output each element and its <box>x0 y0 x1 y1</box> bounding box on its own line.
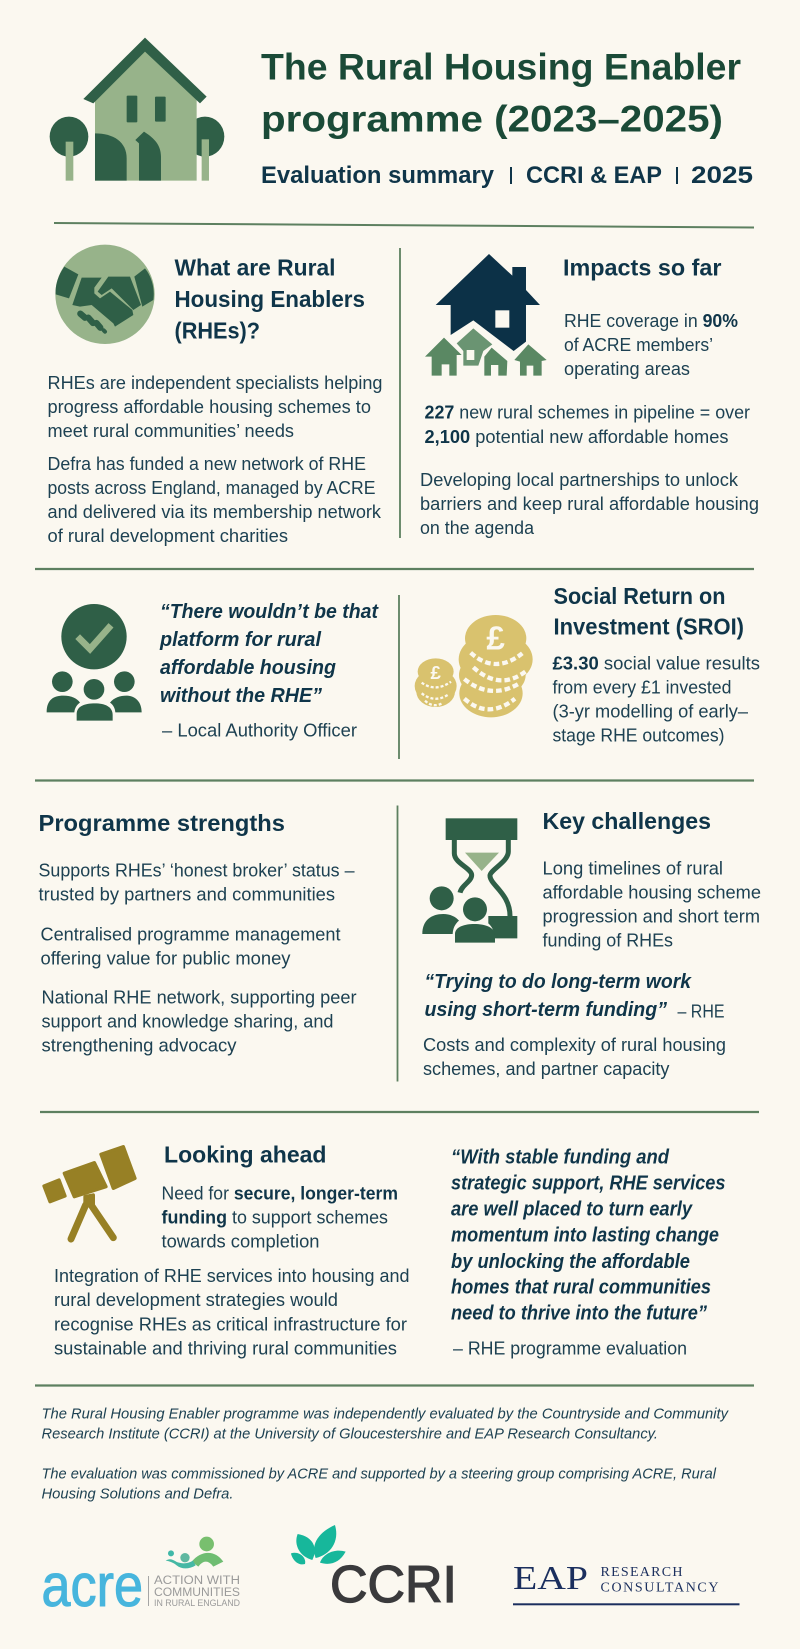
logo: CCRI: CCRI <box>330 1556 457 1614</box>
text block: secure funding: towards completion <box>162 1232 320 1252</box>
panel: looking ahead <box>44 1142 410 1358</box>
quote: momentum into lasting change <box>451 1224 719 1246</box>
text block: secure funding <box>162 1184 398 1252</box>
icon: group with check mark <box>47 604 142 721</box>
quote: affordable housing <box>160 657 336 679</box>
attribution: – Local Authority Officer <box>162 720 357 740</box>
quote: – RHE <box>678 1002 724 1022</box>
panel: key challenges <box>422 808 761 1079</box>
text block: timelines: affordable housing scheme <box>542 882 761 902</box>
panel: what are RHEs <box>48 245 383 546</box>
text block: coverage: operating areas <box>564 359 690 379</box>
text block: honest broker: Supports RHEs’ ‘honest broker’ status – <box>38 860 354 880</box>
text block: pipeline: 227 new rural schemes in pipeline = over <box>424 402 750 422</box>
heading: Investment (SROI) <box>554 614 744 640</box>
text block: coverage: of ACRE members’ <box>564 335 713 355</box>
quote: platform for rural <box>159 629 321 651</box>
header <box>50 38 753 189</box>
icon: coins: £ <box>430 662 441 683</box>
subtitle: CCRI & EAP <box>526 162 662 189</box>
footnote text <box>42 1406 729 1502</box>
quote: are well placed to turn early <box>451 1198 693 1220</box>
quote <box>159 601 379 707</box>
heading <box>174 254 365 344</box>
text block: partnerships: barriers and keep rural affordable housing <box>420 494 759 514</box>
quote: need to thrive into the future” <box>451 1302 707 1324</box>
quote: using short-term funding” <box>424 999 667 1021</box>
text block: Defra funding: posts across England, managed by ACRE <box>48 478 376 498</box>
footnote text: The Rural Housing Enabler programme was independently evaluated by the Countryside and Community <box>42 1406 729 1422</box>
subtitle <box>261 162 753 189</box>
title: programme (2023–2025) <box>261 98 723 140</box>
panel: evaluation quote <box>451 1146 726 1358</box>
text block: timelines: progression and short term <box>542 906 760 926</box>
logo: ACRE: ACTION WITH <box>154 1575 240 1587</box>
text block: national network: National RHE network, supporting peer <box>42 988 356 1008</box>
text block: national network: support and knowledge sharing, and <box>42 1012 334 1032</box>
attribution: – RHE programme evaluation <box>453 1338 687 1358</box>
text block: integration: recognise RHEs as critical infrastructure for <box>54 1314 407 1334</box>
text block: partnerships: Developing local partnerships to unlock <box>420 470 739 490</box>
heading: (RHEs)? <box>174 318 260 344</box>
text block: programme management: Centralised programme management <box>40 924 340 944</box>
heading: Housing Enablers <box>174 286 365 312</box>
text block: coverage <box>564 311 738 379</box>
heading <box>554 583 744 640</box>
heading: Impacts so far <box>563 254 722 280</box>
text block: definition: progress affordable housing schemes to <box>48 397 371 417</box>
footnote text: Research Institute (CCRI) at the University of Gloucestershire and EAP Research Consultancy. <box>42 1426 658 1442</box>
icon: house with trees <box>50 38 224 181</box>
icon: hourglass with people <box>422 818 517 943</box>
text block: programme management <box>40 924 340 968</box>
logo: EAP Research Consultancy: RESEARCH <box>600 1565 682 1580</box>
text block: costs <box>423 1035 726 1079</box>
text block: timelines: funding of RHEs <box>542 930 673 950</box>
logo: ACRE: acre <box>42 1552 143 1619</box>
quote: “There wouldn’t be that <box>160 601 379 623</box>
subtitle: Evaluation summary <box>261 162 494 189</box>
logo: EAP Research Consultancy: CONSULTANCY <box>600 1580 718 1596</box>
quote: by unlocking the affordable <box>451 1251 690 1273</box>
footnote text: Housing Solutions and Defra. <box>42 1486 233 1502</box>
text block: SROI value: from every £1 invested <box>552 678 732 698</box>
logo: EAP Research Consultancy: EAP <box>513 1560 588 1597</box>
text block: honest broker: trusted by partners and communities <box>38 884 335 904</box>
quote: without the RHE” <box>160 685 322 707</box>
text block: timelines: Long timelines of rural <box>542 858 723 878</box>
text block: SROI value: stage RHE outcomes) <box>552 726 724 746</box>
quote <box>424 971 724 1022</box>
text block: national network: strengthening advocacy <box>42 1036 237 1056</box>
footnote text: The evaluation was commissioned by ACRE and supported by a steering group comprising ACRE, Rural <box>42 1466 717 1482</box>
text block: honest broker <box>38 860 354 904</box>
text block: Defra funding <box>48 454 382 546</box>
quote <box>451 1146 726 1324</box>
text block: Defra funding: and delivered via its membership network <box>48 502 382 522</box>
logo: ACRE <box>42 1537 240 1619</box>
text block: secure funding: Need for secure, longer-term <box>162 1184 398 1204</box>
text block: pipeline: 2,100 potential new affordable homes <box>424 427 728 447</box>
title: The Rural Housing Enabler <box>261 46 741 88</box>
text block: definition <box>48 373 383 441</box>
text block: programme management: offering value for public money <box>40 948 290 968</box>
logo: CCRI <box>291 1525 457 1614</box>
text block: Defra funding: of rural development charities <box>48 526 288 546</box>
logo: ACRE: COMMUNITIES <box>154 1587 240 1599</box>
icon: coins <box>415 615 533 717</box>
icon: telescope <box>44 1147 135 1239</box>
heading: What are Rural <box>174 254 336 280</box>
text block: integration <box>54 1266 410 1358</box>
text block: integration: rural development strategies would <box>54 1290 338 1310</box>
heading: Social Return on <box>554 583 726 609</box>
quote: homes that rural communities <box>451 1276 711 1298</box>
text block: timelines <box>542 858 761 950</box>
panel: programme strengths <box>38 810 356 1056</box>
subtitle: 2025 <box>691 162 753 189</box>
text block: partnerships <box>420 470 759 538</box>
quote: strategic support, RHE services <box>451 1172 726 1194</box>
text block: pipeline <box>424 402 750 447</box>
text block: partnerships: on the agenda <box>420 518 535 538</box>
logo: ACRE: IN RURAL ENGLAND <box>154 1598 240 1609</box>
quote: “Trying to do long-term work <box>424 971 692 993</box>
heading: Key challenges <box>542 808 711 834</box>
text block: Defra funding: Defra has funded a new network of RHE <box>48 454 366 474</box>
text block: coverage: RHE coverage in 90% <box>564 311 738 331</box>
quote: “With stable funding and <box>451 1146 670 1168</box>
text block: definition: meet rural communities’ needs <box>48 421 294 441</box>
title <box>261 46 741 140</box>
logo: EAP Research Consultancy <box>513 1560 740 1605</box>
heading: Programme strengths <box>38 810 285 836</box>
icon: coins: £ <box>486 620 505 657</box>
text block: integration: sustainable and thriving rural communities <box>54 1338 397 1358</box>
text block: SROI value: £3.30 social value results <box>552 654 760 674</box>
text block: costs: Costs and complexity of rural housing <box>423 1035 726 1055</box>
text block: integration: Integration of RHE services into housing and <box>54 1266 410 1286</box>
text block: SROI value <box>552 654 760 746</box>
icon: houses <box>425 254 547 376</box>
text block: costs: schemes, and partner capacity <box>423 1059 670 1079</box>
panel: local authority quote <box>47 601 379 740</box>
text block: definition: RHEs are independent specialists helping <box>48 373 383 393</box>
heading: Looking ahead <box>164 1142 326 1168</box>
text block: national network <box>42 988 356 1056</box>
panel: impacts so far <box>420 254 759 538</box>
text block: secure funding: funding to support schemes <box>162 1208 388 1228</box>
text block: SROI value: (3-yr modelling of early– <box>552 702 748 722</box>
icon: handshake <box>55 245 155 344</box>
panel: social return on investment <box>415 583 760 746</box>
